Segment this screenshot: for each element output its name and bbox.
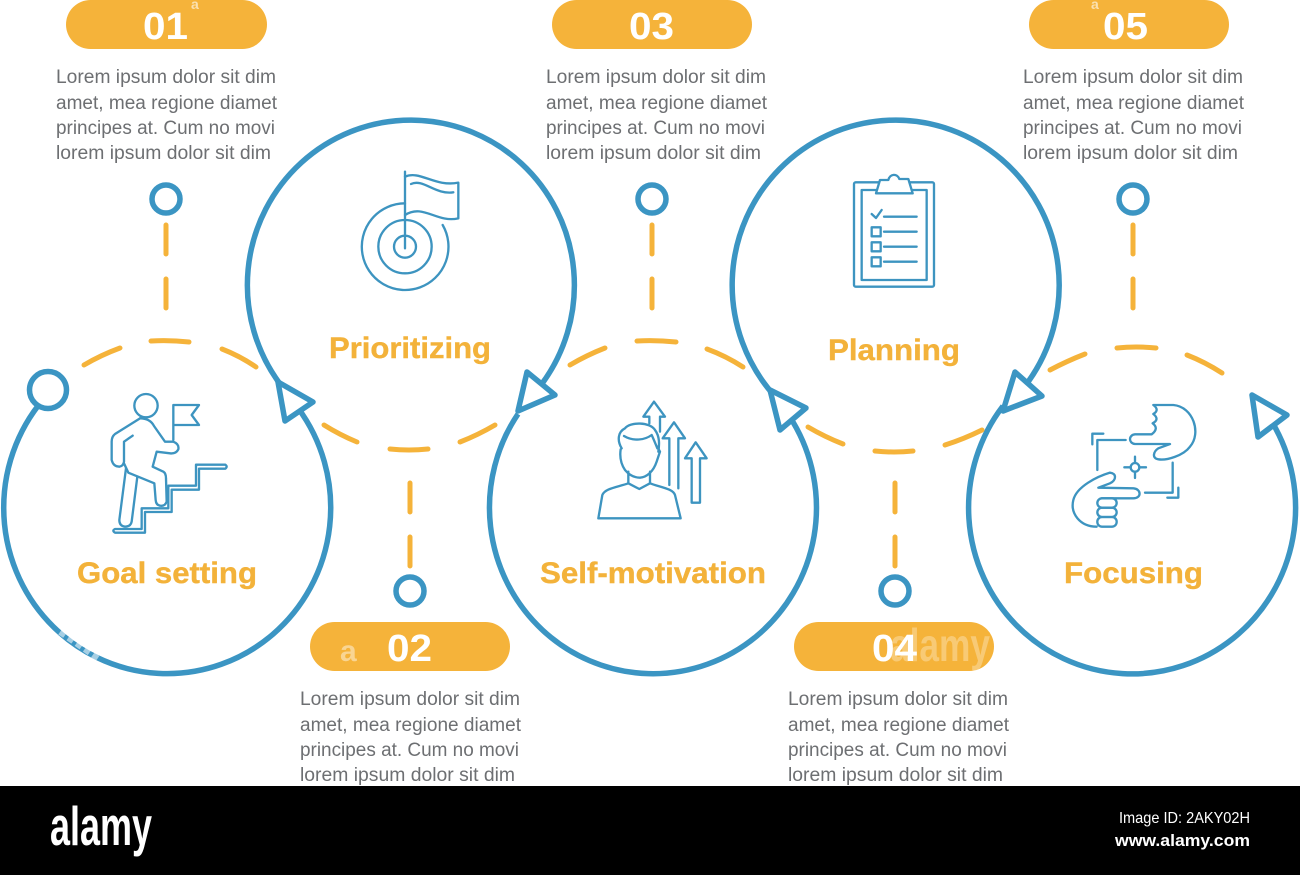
badge 04: alamy	[890, 619, 990, 671]
connector 4	[881, 483, 909, 605]
label: Prioritizing: Prioritizing	[329, 332, 491, 365]
dashed arc over circle 3	[570, 341, 743, 367]
text block 1: principes at. Cum no movi	[56, 118, 275, 139]
start ring marker	[30, 372, 66, 408]
step 1 circle: Goal setting	[4, 394, 331, 674]
footer logo: alamy	[50, 795, 152, 857]
text block 5: Lorem ipsum dolor sit dim	[1023, 67, 1243, 88]
arrowhead 4	[1003, 372, 1042, 411]
text block 3: principes at. Cum no movi	[546, 118, 765, 139]
connector 1	[152, 185, 180, 308]
text block 5: principes at. Cum no movi	[1023, 118, 1242, 139]
label: Focusing: Focusing	[1064, 557, 1203, 590]
text block 2: Lorem ipsum dolor sit dim	[300, 689, 520, 710]
step 4 circle: Planning	[732, 120, 1059, 393]
badge 02: 02	[387, 628, 432, 670]
step 5 circle: Focusing	[969, 406, 1296, 674]
badge 04	[794, 619, 994, 671]
arrowhead 1	[278, 382, 313, 421]
icon: clipboard checklist	[854, 175, 934, 287]
arrowhead 2	[518, 372, 555, 411]
badge 05: 05	[1103, 6, 1148, 48]
text block 4: Lorem ipsum dolor sit dim	[788, 689, 1008, 710]
step 3 circle: Self-motivation	[489, 414, 816, 674]
badge 01: 01	[143, 6, 188, 48]
step 2 circle: Prioritizing	[247, 120, 574, 385]
dashed arc over circle 5	[1050, 347, 1222, 373]
label: Planning: Planning	[828, 334, 960, 367]
text block 4	[788, 689, 1010, 786]
icon: person climbing stairs with flag	[112, 394, 227, 533]
text block 1	[56, 67, 278, 164]
text block 2	[300, 689, 522, 786]
text block 1: Lorem ipsum dolor sit dim	[56, 67, 276, 88]
label: Goal setting: Goal setting	[77, 557, 257, 590]
connector 3	[638, 185, 666, 308]
badge 04: 04	[872, 628, 917, 670]
text block 2: lorem ipsum dolor sit dim	[300, 765, 515, 786]
footer bar	[0, 786, 1300, 875]
text block 5: amet, mea regione diamet	[1023, 93, 1245, 114]
badge 01	[66, 0, 267, 49]
text block 1: lorem ipsum dolor sit dim	[56, 143, 271, 164]
text block 2: principes at. Cum no movi	[300, 740, 519, 761]
badge 03	[552, 0, 752, 49]
connector 5	[1119, 185, 1147, 308]
arrowhead 3	[770, 390, 806, 430]
dashed arc under circle 4	[808, 427, 982, 452]
footer image id: Image ID: 2AKY02H	[1119, 810, 1250, 827]
dashed arc over circle 1	[84, 341, 256, 367]
text block 1: amet, mea regione diamet	[56, 93, 278, 114]
badge 05	[1029, 0, 1229, 49]
dashed arc under circle 2	[324, 425, 495, 450]
icon: person with rising arrows	[598, 402, 707, 518]
text block 3: amet, mea regione diamet	[546, 93, 768, 114]
text block 4: principes at. Cum no movi	[788, 740, 1007, 761]
text block 2: amet, mea regione diamet	[300, 715, 522, 736]
text block 4: amet, mea regione diamet	[788, 715, 1010, 736]
label: Self-motivation: Self-motivation	[540, 557, 766, 590]
arrowhead 5	[1252, 395, 1287, 437]
icon: target with flag	[362, 172, 458, 290]
connector 2	[396, 483, 424, 605]
text block 4: lorem ipsum dolor sit dim	[788, 765, 1003, 786]
text block 3: Lorem ipsum dolor sit dim	[546, 67, 766, 88]
badge 03: 03	[629, 6, 674, 48]
text block 5: lorem ipsum dolor sit dim	[1023, 143, 1238, 164]
text block 3	[546, 67, 768, 164]
text block 5	[1023, 67, 1245, 164]
footer website: www.alamy.com	[1114, 831, 1250, 850]
icon: hands framing focus target	[1073, 405, 1195, 527]
badge 02	[310, 622, 510, 671]
text block 3: lorem ipsum dolor sit dim	[546, 143, 761, 164]
badge 02: a	[340, 635, 357, 668]
